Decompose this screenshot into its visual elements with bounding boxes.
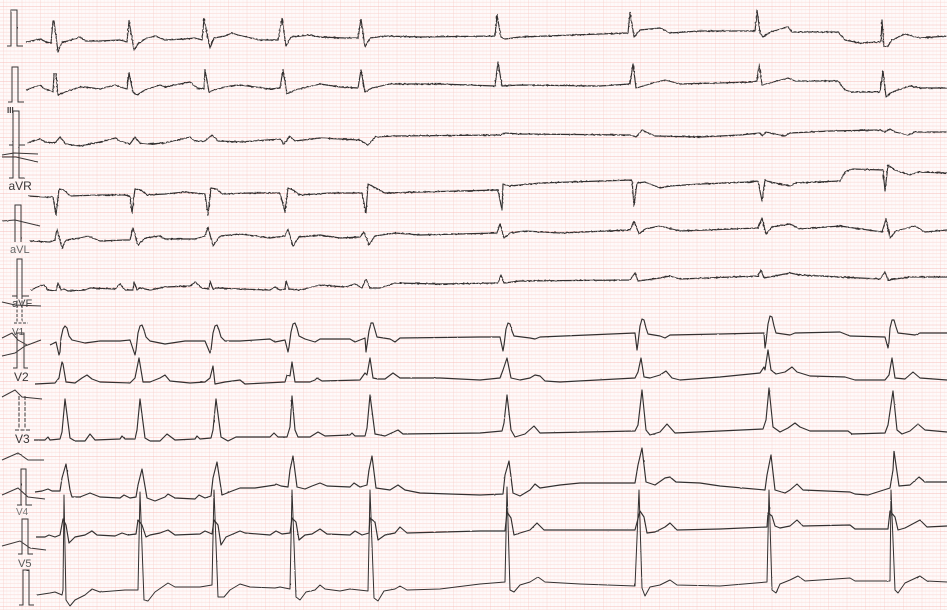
label V5: V5	[18, 558, 31, 570]
label aVL: aVL	[10, 244, 30, 256]
calibration pulse aVL	[15, 205, 21, 242]
lead labels	[7, 106, 32, 570]
wiggle trace aVF	[2, 302, 41, 306]
trace: lead III	[27, 129, 947, 146]
calibration pulse V2	[13, 333, 28, 368]
wiggle trace V4 upper	[2, 453, 44, 460]
wiggle trace V2	[2, 390, 42, 399]
label V3: V3	[15, 432, 30, 446]
traces: chest leads	[34, 316, 947, 606]
trace: lead V6	[37, 487, 947, 606]
label aVR: aVR	[8, 179, 32, 193]
calibration pulse V5	[18, 519, 33, 554]
calibration pulse II	[8, 67, 24, 102]
wiggle trace V4 lower	[2, 488, 45, 499]
trace: lead I	[26, 10, 947, 52]
label V2: V2	[14, 370, 29, 384]
trace: lead V1	[50, 316, 947, 355]
trace: lead V5	[36, 511, 947, 545]
trace: lead II	[26, 62, 947, 97]
trace: lead V2	[35, 350, 947, 384]
calibration pulse aVF	[12, 259, 29, 296]
left column: calibration pulses and lead labels	[2, 10, 46, 605]
calibration pulse aVR	[9, 145, 25, 178]
trace: lead V4	[35, 448, 947, 501]
label aVF: aVF	[12, 298, 32, 310]
wiggle traces at aVR	[2, 153, 38, 162]
trace: lead aVL	[30, 218, 947, 248]
label III: III	[7, 106, 14, 115]
trace: lead aVR	[28, 165, 947, 215]
wiggle trace aVL	[2, 220, 40, 226]
trace: lead aVF	[31, 270, 947, 291]
calibration pulse V4	[17, 469, 32, 505]
calibration pulse V6	[19, 570, 34, 605]
trace: lead V3	[34, 388, 947, 441]
calibration pulse I	[7, 10, 23, 46]
calibration pulse V3	[15, 396, 30, 430]
traces: limb leads	[26, 10, 947, 291]
label V1: V1	[12, 327, 25, 338]
calibration pulse V1	[14, 296, 28, 323]
wiggle trace V5	[2, 541, 46, 550]
label V4: V4	[16, 507, 29, 518]
wiggle traces V1	[2, 333, 41, 356]
calibration pulse III	[9, 111, 25, 145]
